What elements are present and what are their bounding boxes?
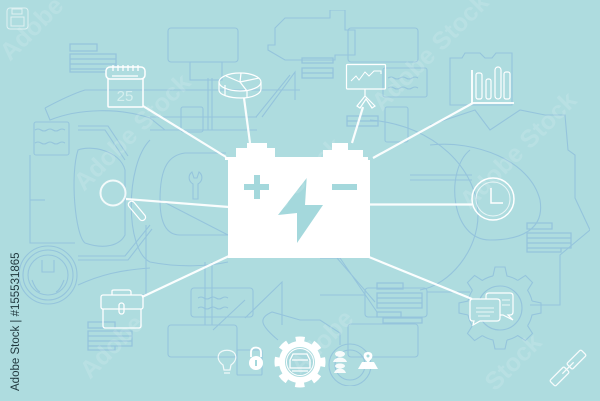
car [290, 354, 310, 368]
wheel ring: left [19, 246, 77, 304]
watermarks: Adobe [74, 309, 149, 384]
battery [225, 143, 370, 258]
icon: lightbulb [218, 350, 236, 373]
icon: magnifier [100, 180, 147, 222]
icon: bar chart [472, 67, 514, 103]
wave lines [35, 77, 418, 309]
ring: bottom [329, 344, 371, 386]
list stacks [70, 44, 571, 350]
icon: calendar [106, 65, 145, 107]
icon: pie chart [219, 73, 261, 98]
watermarks: Adobe Stock [220, 132, 348, 260]
icon: save disk [7, 8, 28, 29]
lightning bolt [278, 178, 323, 243]
watermarks: Adobe Stock [454, 86, 582, 214]
minus sign [332, 184, 357, 190]
icon: gear with car [278, 340, 322, 384]
icon: map pin [358, 352, 378, 369]
icon: chain link [550, 350, 586, 386]
icon: clock [472, 178, 514, 220]
wrench [189, 172, 202, 199]
watermarks: Stock [479, 328, 547, 396]
watermarks: Adobe [284, 304, 359, 379]
gear outline [458, 266, 542, 350]
icon: briefcase [101, 290, 143, 328]
icon: calendar: 25 [117, 88, 133, 105]
connector lines [126, 98, 473, 299]
icon: presentation board [346, 64, 386, 108]
icon: padlock [249, 348, 263, 370]
watermarks: Adobe Stock [68, 68, 196, 196]
icon: chat bubbles [470, 293, 513, 325]
stock id label: Adobe Stock | #155531865 [10, 252, 22, 391]
plus sign [244, 175, 269, 199]
icon: people [333, 351, 347, 373]
